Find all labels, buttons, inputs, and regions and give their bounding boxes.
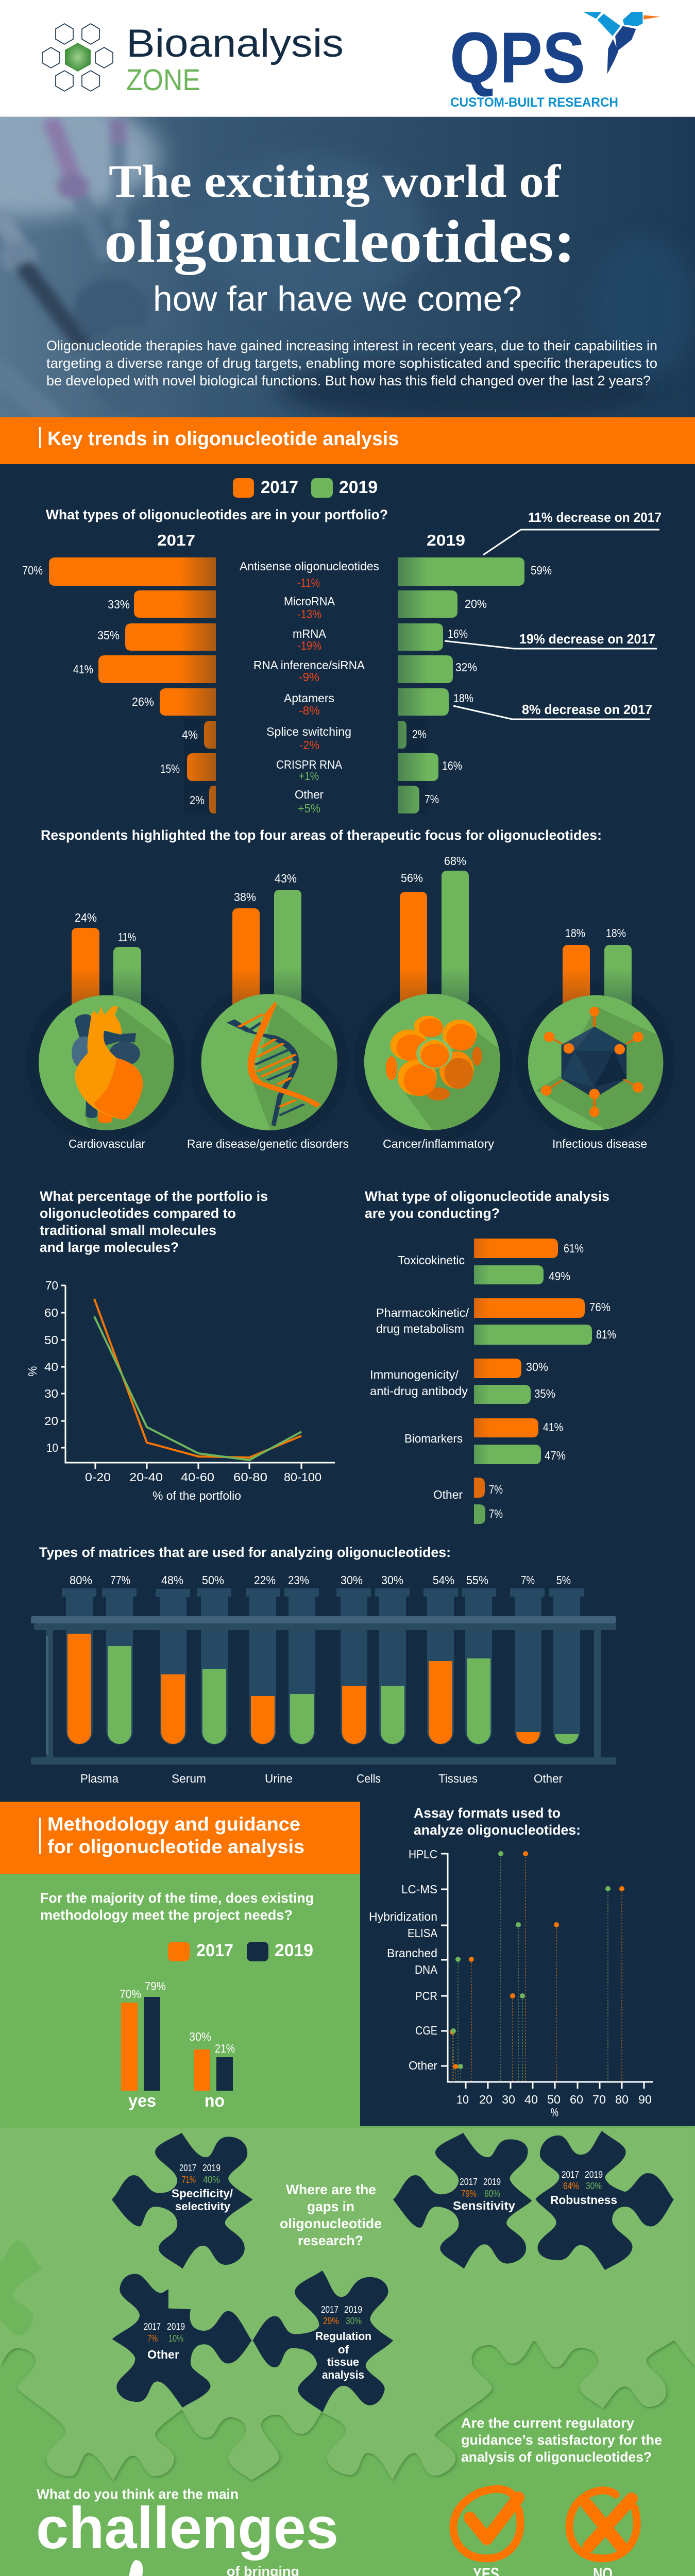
gap: robustness: 2017 bbox=[562, 2170, 579, 2180]
values 2017: 4% bbox=[182, 728, 198, 741]
gap: regulation of tissue analysis: of bbox=[338, 2343, 349, 2356]
gap: regulation of tissue analysis: 30% bbox=[346, 2316, 362, 2326]
values: 50% bbox=[202, 1573, 224, 1587]
axis values: 80 bbox=[615, 2093, 629, 2106]
legend 2017 2019 bbox=[233, 478, 378, 498]
question: Are the current regulatory bbox=[461, 2415, 634, 2431]
format labels: ELISA bbox=[408, 1926, 438, 1940]
question: oligonucleotide bbox=[280, 2216, 382, 2231]
values bbox=[70, 1573, 571, 1587]
values: 79% bbox=[145, 1979, 166, 1993]
legend 2017 2019: 2017 bbox=[261, 478, 298, 497]
gap: robustness: Robustness bbox=[550, 2193, 617, 2207]
axis values: % bbox=[551, 2106, 558, 2119]
category labels: +1% bbox=[299, 769, 319, 783]
question: Where are the bbox=[286, 2182, 376, 2197]
values: 80% bbox=[70, 1573, 92, 1587]
matrix labels: Tissues bbox=[438, 1772, 478, 1785]
format labels: DNA bbox=[415, 1963, 438, 1976]
gap: regulation of tissue analysis bbox=[315, 2304, 371, 2381]
matrix labels: Cells bbox=[357, 1772, 381, 1785]
values 2019: 16% bbox=[442, 759, 462, 772]
chart: methodology meets needs: no bbox=[205, 2091, 225, 2111]
labels: drug metabolism bbox=[376, 1322, 464, 1335]
gap: regulation of tissue analysis: 29% bbox=[323, 2316, 339, 2326]
question: What type of oligonucleotide analysis bbox=[365, 1189, 609, 1204]
axis labels: 60 bbox=[44, 1306, 58, 1319]
heading: Assay formats used to bbox=[414, 1805, 561, 1821]
puzzle pieces bbox=[0, 2128, 695, 2480]
title: how far have we come? bbox=[153, 279, 522, 318]
heading: analyze oligonucleotides: bbox=[414, 1822, 581, 1838]
category labels: mRNA bbox=[293, 627, 327, 640]
bar values: 24% bbox=[75, 911, 97, 924]
chart: types of oligonucleotides: 2017 bbox=[157, 531, 195, 549]
values: 30% bbox=[341, 1573, 363, 1587]
hero background image bbox=[0, 94, 695, 423]
values 2019: 7% bbox=[425, 792, 439, 806]
bars bbox=[474, 1239, 592, 1524]
icon: virus bbox=[528, 995, 664, 1130]
axis values: 30 bbox=[502, 2093, 515, 2106]
legend bbox=[168, 1941, 313, 1961]
values: 23% bbox=[288, 1573, 309, 1587]
chart: types of oligonucleotides bbox=[22, 507, 662, 815]
axis labels: 50 bbox=[44, 1333, 58, 1347]
area labels: Infectious disease bbox=[552, 1137, 647, 1150]
heading: challenges bbox=[36, 2496, 338, 2561]
hole: regulation bbox=[252, 2270, 393, 2412]
axis labels: 80-100 bbox=[284, 1470, 321, 1484]
title: The exciting world of bbox=[109, 156, 561, 207]
values 2019: 20% bbox=[465, 597, 487, 611]
bar values: 38% bbox=[234, 890, 256, 904]
bar values: 43% bbox=[275, 872, 297, 885]
gap: specificity bbox=[172, 2163, 233, 2213]
category labels bbox=[240, 560, 379, 815]
bar values bbox=[75, 854, 626, 944]
drop lines bbox=[452, 1854, 622, 2082]
axis values: 50 bbox=[547, 2093, 561, 2106]
icon: check bbox=[453, 2489, 520, 2558]
category labels: Other bbox=[295, 788, 324, 801]
axis values: 10 bbox=[456, 2093, 469, 2106]
gap: other: 2019 bbox=[167, 2321, 185, 2332]
logo: QPS: QPS bbox=[450, 17, 585, 98]
values 2017: 15% bbox=[160, 762, 180, 775]
values: 76% bbox=[589, 1300, 611, 1314]
chart: therapeutic focus bbox=[26, 827, 675, 1150]
axis values: 40 bbox=[524, 2093, 538, 2106]
gap: sensitivity bbox=[453, 2177, 515, 2212]
icon: heart bbox=[39, 995, 174, 1130]
bars 2017 bbox=[49, 557, 216, 814]
values 2019: 2% bbox=[412, 727, 427, 741]
labels: anti-drug antibody bbox=[370, 1384, 468, 1398]
axis labels: % bbox=[26, 1366, 39, 1377]
format labels: CGE bbox=[415, 2024, 437, 2037]
intro paragraph: Oligonucleotide therapies have gained increasing interest in recent years, due to their capabilities in bbox=[46, 338, 657, 353]
category labels: RNA inference/siRNA bbox=[253, 658, 365, 672]
line 2017 bbox=[94, 1299, 301, 1458]
bar values: 18% bbox=[606, 926, 626, 940]
values: 5% bbox=[556, 1573, 571, 1587]
test tubes bbox=[62, 1588, 584, 1744]
values bbox=[489, 1242, 616, 1520]
values: 61% bbox=[564, 1242, 584, 1255]
gap: other: 7% bbox=[147, 2333, 158, 2344]
values: 49% bbox=[549, 1269, 570, 1283]
gap: regulation of tissue analysis: 2019 bbox=[344, 2304, 362, 2315]
values 2017: 35% bbox=[97, 629, 120, 642]
intro paragraph bbox=[46, 338, 657, 388]
gap: sensitivity: 2019 bbox=[483, 2177, 501, 2187]
question: research? bbox=[298, 2233, 363, 2248]
header: logos bbox=[0, 0, 695, 117]
callouts: 11% decrease on 2017 bbox=[528, 510, 662, 525]
format labels: Other bbox=[409, 2059, 437, 2072]
gap: other bbox=[144, 2321, 185, 2361]
chart: types of oligonucleotides: 2019 bbox=[427, 531, 465, 549]
bar values: 11% bbox=[118, 930, 136, 944]
values: 70% bbox=[120, 1987, 141, 2001]
values: 30% bbox=[381, 1573, 403, 1587]
gap: robustness: 30% bbox=[586, 2181, 602, 2191]
question: analysis of oligonucleotides? bbox=[461, 2449, 652, 2465]
values 2019: 18% bbox=[453, 691, 473, 705]
question bbox=[40, 1890, 314, 1923]
values: 7% bbox=[489, 1483, 503, 1496]
heading: What do you think are the main bbox=[37, 2486, 239, 2502]
values: 7% bbox=[489, 1507, 503, 1520]
gap: sensitivity: 2017 bbox=[460, 2177, 478, 2187]
axis labels: 20 bbox=[44, 1414, 58, 1428]
line 2019 bbox=[94, 1316, 301, 1460]
heading: Respondents highlighted the top four areas of therapeutic focus for oligonucleotides: bbox=[41, 827, 602, 843]
gap: sensitivity: Sensitivity bbox=[453, 2199, 515, 2212]
logo: Bioanalysis Zone bbox=[42, 22, 344, 97]
question: For the majority of the time, does existing bbox=[40, 1890, 314, 1906]
gap: sensitivity: 79% bbox=[461, 2189, 477, 2199]
category labels: -11% bbox=[297, 576, 320, 589]
hole: robustness bbox=[535, 2131, 674, 2270]
values: 81% bbox=[596, 1328, 616, 1341]
rack bbox=[31, 1616, 616, 1765]
gap: regulation of tissue analysis: analysis bbox=[322, 2368, 364, 2381]
legend 2017 2019: 2019 bbox=[339, 478, 378, 497]
gap: specificity: 40% bbox=[203, 2175, 220, 2185]
values 2017 bbox=[22, 564, 205, 807]
legend: 2017 bbox=[196, 1941, 233, 1960]
icon: DNA bbox=[201, 994, 337, 1130]
chart: type of analysis bbox=[365, 1189, 616, 1524]
axis labels: 10 bbox=[46, 1441, 58, 1454]
category labels: -13% bbox=[297, 607, 321, 621]
section heading: methodology: Methodology and guidance bbox=[47, 1814, 300, 1835]
values: 30% bbox=[189, 2030, 211, 2043]
area labels: Rare disease/genetic disorders bbox=[187, 1137, 349, 1150]
values 2019: 16% bbox=[448, 627, 468, 640]
bars 2019 bbox=[398, 557, 524, 814]
values: 47% bbox=[545, 1449, 566, 1462]
format labels: Branched bbox=[387, 1946, 437, 1960]
category labels: MicroRNA bbox=[284, 595, 335, 608]
values 2017: 33% bbox=[108, 598, 130, 611]
tube fills bbox=[67, 1634, 579, 1744]
question bbox=[365, 1189, 609, 1221]
axis values: 60 bbox=[570, 2093, 583, 2106]
category labels: +5% bbox=[298, 802, 320, 815]
intro paragraph: targeting a diverse range of drug targets, enabling more sophisticated and specific therapeutics to bbox=[46, 355, 657, 371]
chart: matrices test tubes bbox=[31, 1545, 616, 1785]
question: and large molecules? bbox=[40, 1240, 179, 1255]
gap: specificity: 71% bbox=[182, 2175, 196, 2185]
title bbox=[104, 156, 575, 318]
format labels: Hybridization bbox=[369, 1910, 437, 1923]
gap: other: Other bbox=[147, 2348, 179, 2361]
gap: other: 2017 bbox=[144, 2321, 161, 2332]
gap: robustness: 64% bbox=[563, 2181, 579, 2191]
format labels bbox=[369, 1848, 438, 2072]
logo: QPS bbox=[450, 12, 660, 110]
values: 55% bbox=[466, 1573, 488, 1587]
category labels: Aptamers bbox=[284, 691, 334, 705]
hole: other bbox=[112, 2274, 252, 2408]
question: guidance’s satisfactory for the bbox=[461, 2432, 662, 2448]
gap: regulation of tissue analysis: 2017 bbox=[321, 2304, 338, 2315]
values: 54% bbox=[433, 1573, 454, 1587]
values: 22% bbox=[254, 1573, 276, 1587]
dots bbox=[450, 1851, 624, 2069]
category labels: -19% bbox=[297, 639, 321, 652]
heading bbox=[414, 1805, 581, 1838]
section heading: key trends: Key trends in oligonucleotide analysis bbox=[47, 428, 399, 450]
icon: cross bbox=[569, 2490, 637, 2558]
axis values: 20 bbox=[479, 2093, 493, 2106]
area labels: Cancer/inflammatory bbox=[383, 1137, 494, 1150]
section heading: methodology bbox=[0, 1802, 360, 1874]
matrix labels: Other bbox=[534, 1772, 563, 1785]
bar values: 56% bbox=[401, 871, 423, 885]
heading: Types of matrices that are used for analyzing oligonucleotides: bbox=[39, 1545, 451, 1560]
panel: regulatory guidance bbox=[453, 2415, 662, 2576]
category labels: -9% bbox=[299, 670, 319, 684]
values 2017: 2% bbox=[190, 793, 205, 807]
gap: specificity: Specificity/ bbox=[172, 2187, 233, 2200]
callouts: 19% decrease on 2017 bbox=[519, 631, 655, 647]
values 2019 bbox=[412, 564, 552, 806]
figure climbing bbox=[128, 2560, 217, 2576]
question: methodology meet the project needs? bbox=[40, 1907, 293, 1923]
gap: robustness: 2019 bbox=[585, 2170, 603, 2180]
logo: Bioanalysis Zone: ZONE bbox=[126, 63, 200, 97]
labels: Immunogenicity/ bbox=[370, 1368, 459, 1381]
axis labels: 20-40 bbox=[129, 1470, 163, 1484]
axis values: 90 bbox=[638, 2093, 652, 2106]
axes bbox=[441, 1853, 653, 2089]
values bbox=[120, 1979, 235, 2055]
values 2017: 41% bbox=[73, 663, 93, 676]
labels: Pharmacokinetic/ bbox=[376, 1306, 469, 1319]
question: oligonucleotides compared to bbox=[40, 1206, 236, 1221]
gap: specificity: 2019 bbox=[202, 2163, 221, 2173]
axis labels: 0-20 bbox=[85, 1470, 111, 1484]
callouts bbox=[445, 510, 662, 719]
gap: specificity: 2017 bbox=[179, 2163, 196, 2173]
matrix labels: Serum bbox=[172, 1772, 206, 1785]
axis labels: 30 bbox=[44, 1387, 58, 1400]
chart: methodology meets needs: yes bbox=[128, 2091, 156, 2111]
values 2017: 26% bbox=[132, 695, 154, 708]
bar values: 68% bbox=[444, 854, 466, 868]
matrix labels: Plasma bbox=[80, 1772, 118, 1785]
values 2017: 70% bbox=[22, 564, 43, 577]
green background: methodology and puzzle bbox=[0, 1874, 360, 2128]
axis labels: 40-60 bbox=[181, 1470, 214, 1484]
gap: sensitivity: 60% bbox=[484, 2189, 500, 2199]
values 2019: 59% bbox=[531, 564, 552, 577]
labels: Other bbox=[433, 1488, 463, 1501]
gap: regulation of tissue analysis: Regulation bbox=[315, 2330, 371, 2343]
axis labels: 40 bbox=[44, 1360, 58, 1374]
gap: specificity: selectivity bbox=[175, 2200, 231, 2213]
category labels: -2% bbox=[299, 738, 319, 752]
icon circles bbox=[39, 994, 671, 1144]
values: 35% bbox=[534, 1387, 555, 1400]
values: 41% bbox=[543, 1420, 563, 1434]
values: 48% bbox=[161, 1573, 183, 1587]
panel: challenges ladder bbox=[0, 2486, 338, 2576]
format labels: HPLC bbox=[409, 1848, 437, 1861]
callouts: 8% decrease on 2017 bbox=[522, 702, 652, 717]
puzzle: gaps in research bbox=[0, 2128, 695, 2480]
chart: portfolio percentage line chart bbox=[26, 1189, 335, 1502]
category labels: Splice switching bbox=[266, 725, 351, 738]
bar values: 18% bbox=[565, 926, 585, 940]
logo: QPS: CUSTOM-BUILT RESEARCH bbox=[450, 95, 618, 110]
question: What types of oligonucleotides are in your portfolio? bbox=[46, 507, 388, 522]
axis labels: % of the portfolio bbox=[152, 1489, 241, 1502]
values 2019: 32% bbox=[455, 660, 477, 674]
legend: 2019 bbox=[275, 1941, 313, 1960]
gap: robustness bbox=[550, 2170, 617, 2207]
hole: sensitivity bbox=[393, 2133, 532, 2269]
labels: Toxicokinetic bbox=[398, 1253, 465, 1267]
icon: cancer cells bbox=[364, 994, 500, 1130]
question: gaps in bbox=[307, 2199, 354, 2214]
values: 30% bbox=[526, 1360, 548, 1374]
format labels: PCR bbox=[415, 1989, 437, 2003]
question: What percentage of the portfolio is bbox=[40, 1189, 268, 1204]
question: traditional small molecules bbox=[40, 1223, 216, 1238]
values: 77% bbox=[110, 1573, 130, 1587]
category labels: -8% bbox=[299, 704, 320, 717]
values: 7% bbox=[521, 1573, 535, 1587]
values: 21% bbox=[215, 2042, 235, 2055]
matrix labels bbox=[80, 1772, 563, 1785]
question bbox=[280, 2182, 382, 2248]
question: are you conducting? bbox=[365, 1206, 500, 1221]
axis labels: 60-80 bbox=[233, 1470, 267, 1484]
logo: Bioanalysis Zone: Bioanalysis bbox=[126, 22, 344, 65]
panel: assay formats bbox=[360, 1802, 695, 2126]
section heading: methodology: for oligonucleotide analysis bbox=[47, 1836, 304, 1857]
vertical bars bbox=[72, 871, 632, 1015]
gap: regulation of tissue analysis: tissue bbox=[327, 2355, 359, 2368]
area labels: Cardiovascular bbox=[69, 1137, 145, 1150]
format labels: LC-MS bbox=[401, 1883, 437, 1896]
axis values bbox=[456, 2093, 652, 2119]
chart: methodology meets needs bbox=[40, 1890, 314, 2111]
question bbox=[461, 2415, 662, 2465]
title: oligonucleotides: bbox=[104, 208, 575, 275]
category labels: Antisense oligonucleotides bbox=[240, 560, 379, 573]
area labels bbox=[69, 1137, 647, 1150]
section heading: key trends bbox=[0, 417, 695, 464]
axis values: 70 bbox=[592, 2093, 606, 2106]
hero panel bbox=[0, 94, 695, 423]
intro paragraph: be developed with novel biological functions. But how has this field changed over the last 2 years? bbox=[46, 373, 651, 388]
axes bbox=[61, 1285, 335, 1469]
axis labels: 70 bbox=[45, 1279, 58, 1292]
hole: specificity bbox=[112, 2133, 252, 2269]
bars bbox=[121, 1997, 233, 2091]
axis labels bbox=[26, 1279, 321, 1502]
labels bbox=[370, 1253, 469, 1501]
matrix labels: Urine bbox=[265, 1772, 293, 1785]
gap: other: 10% bbox=[168, 2333, 183, 2344]
question bbox=[40, 1189, 268, 1255]
labels: Biomarkers bbox=[404, 1432, 463, 1445]
category labels: CRISPR RNA bbox=[276, 758, 343, 771]
